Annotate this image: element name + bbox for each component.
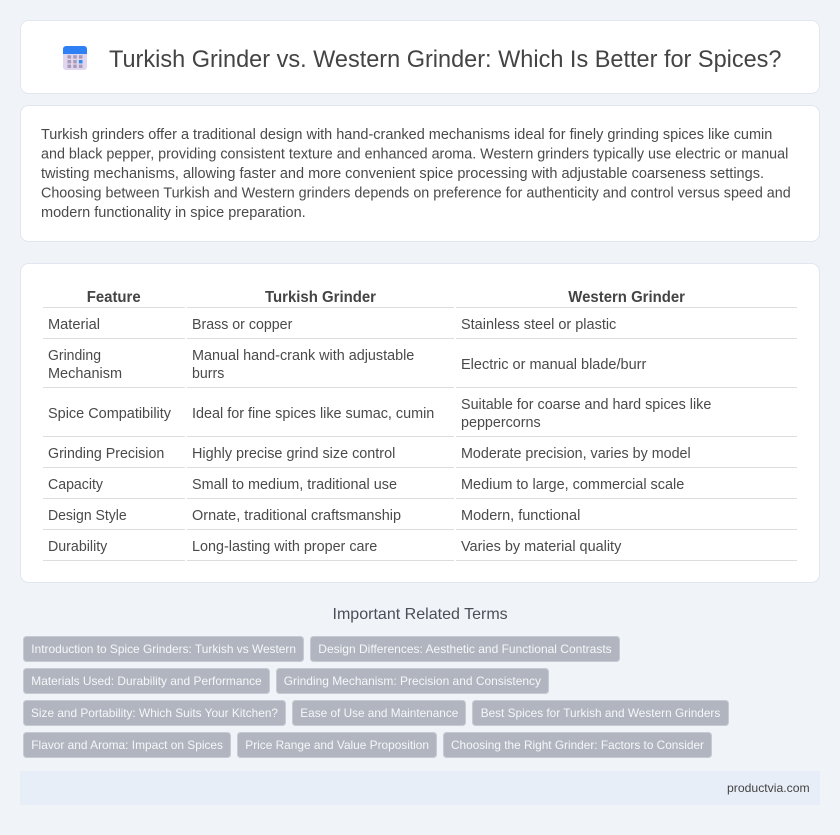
table row: design style: Design Style xyxy=(48,508,127,524)
table row: material xyxy=(48,317,616,333)
tag: Choosing the Right Grinder: Factors to Consider xyxy=(451,738,704,752)
title: Turkish Grinder vs. Western Grinder: Which Is Better for Spices? xyxy=(109,46,782,73)
table row: durability: Varies by material quality xyxy=(461,539,622,555)
text block: introduction paragraph: Turkish grinders offer a traditional design with hand-cranked mechanisms ideal for finely grinding spices like cumin xyxy=(41,127,772,143)
table header row: Western Grinder xyxy=(568,289,685,306)
table row: spice compatibility: Spice Compatibility xyxy=(48,406,172,422)
table row: durability xyxy=(48,539,622,555)
tag: Flavor and Aroma: Impact on Spices xyxy=(31,738,223,752)
tag xyxy=(24,668,270,694)
panel: header xyxy=(20,20,820,94)
table row: design style: Ornate, traditional craftsmanship xyxy=(192,508,401,524)
icon: calendar xyxy=(63,46,87,70)
panel: comparison table xyxy=(20,264,820,582)
table header row: Feature xyxy=(87,289,141,306)
table row: material: Material xyxy=(48,317,100,333)
table row: durability: Long-lasting with proper care xyxy=(192,539,377,555)
tag: Price Range and Value Proposition xyxy=(245,738,429,752)
tag: Ease of Use and Maintenance xyxy=(300,706,459,720)
table row: spice compatibility: Suitable for coarse and hard spices like xyxy=(461,397,711,413)
table row: grinding mechanism: Grinding xyxy=(48,348,101,364)
related terms tags xyxy=(24,636,728,758)
heading: important related terms: Important Related Terms xyxy=(332,606,508,623)
table row: design style: Modern, functional xyxy=(461,508,580,524)
table row: grinding mechanism: burrs xyxy=(192,366,224,382)
footer source text: productvia.com xyxy=(727,781,810,795)
text block: introduction paragraph: modern functionality in spice preparation. xyxy=(41,205,306,221)
tag xyxy=(444,732,712,758)
table row: grinding precision: Highly precise grind size control xyxy=(192,446,395,462)
panel: introduction xyxy=(20,106,820,242)
table row: design style xyxy=(48,508,580,524)
table row: grinding precision: Moderate precision, varies by model xyxy=(461,446,691,462)
tag xyxy=(238,732,436,758)
table row: spice compatibility: peppercorns xyxy=(461,415,541,431)
table row: grinding mechanism: Manual hand-crank with adjustable xyxy=(192,348,414,364)
text block: introduction paragraph xyxy=(41,127,791,221)
tag xyxy=(24,636,304,662)
table row: grinding precision xyxy=(48,446,691,462)
footer xyxy=(20,771,820,805)
table row: grinding mechanism: Mechanism xyxy=(48,366,122,382)
tag: Best Spices for Turkish and Western Grinders xyxy=(481,706,720,720)
text block: introduction paragraph: twisting mechanisms, allowing faster and more convenient spice processing with adjustable coarseness settings. xyxy=(41,166,764,182)
table header row: Turkish Grinder xyxy=(265,289,376,306)
text block: introduction paragraph: and black pepper, providing consistent texture and enhanced aroma. Western grinders typically use electric or manual xyxy=(41,147,788,163)
table header row xyxy=(87,289,685,306)
tag xyxy=(310,636,620,662)
table row: capacity: Small to medium, traditional use xyxy=(192,477,397,493)
table row: spice compatibility: Ideal for fine spices like sumac, cumin xyxy=(192,406,434,422)
tag xyxy=(472,700,728,726)
text block: introduction paragraph: Choosing between Turkish and Western grinders depends on preference for authenticity and control versus speed and xyxy=(41,186,791,202)
tag xyxy=(24,700,286,726)
table row: durability: Durability xyxy=(48,539,108,555)
tag xyxy=(24,732,230,758)
tag xyxy=(292,700,466,726)
tag xyxy=(276,668,548,694)
tag: Size and Portability: Which Suits Your Kitchen? xyxy=(31,706,278,720)
tag: Design Differences: Aesthetic and Functional Contrasts xyxy=(318,642,612,656)
table row: grinding mechanism: Electric or manual blade/burr xyxy=(461,357,647,373)
table row: capacity: Capacity xyxy=(48,477,104,493)
table row: spice compatibility xyxy=(48,397,711,431)
tag: Materials Used: Durability and Performance xyxy=(31,674,262,688)
tag: Grinding Mechanism: Precision and Consistency xyxy=(284,674,541,688)
table row: grinding precision: Grinding Precision xyxy=(48,446,164,462)
table row: material: Brass or copper xyxy=(192,317,293,333)
table row: material: Stainless steel or plastic xyxy=(461,317,616,333)
tag: Introduction to Spice Grinders: Turkish vs Western xyxy=(31,642,296,656)
table row: capacity xyxy=(48,477,684,493)
table row: grinding mechanism xyxy=(48,348,647,382)
table row: capacity: Medium to large, commercial scale xyxy=(461,477,684,493)
